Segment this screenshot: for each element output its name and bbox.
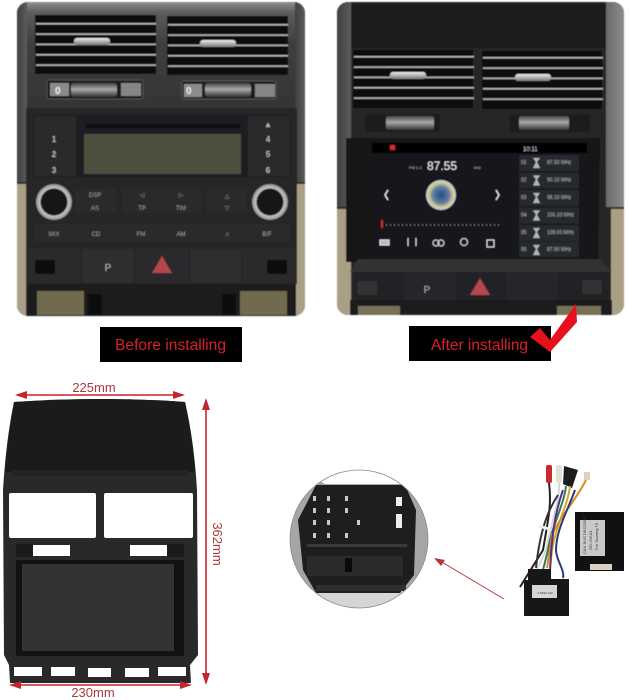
preset buttons: 3 [52, 166, 57, 175]
hazard triangle [470, 278, 490, 295]
radio function buttons: △ [225, 194, 230, 200]
radio function buttons: ▽ [225, 206, 230, 212]
preset frequency list: 90.10 MHz [547, 178, 572, 184]
harness plug: 2-5395-132 [537, 591, 553, 595]
upper hood shade [5, 399, 195, 472]
left air vent [35, 15, 156, 74]
preset buttons [52, 120, 272, 175]
radio function buttons: TIM [176, 206, 186, 212]
right air vent [482, 51, 603, 109]
panel: dashboard after installing [337, 2, 624, 315]
hazard triangle [152, 256, 172, 273]
radio function buttons: TP [138, 206, 146, 212]
icon: red check mark [530, 304, 577, 352]
radio function buttons: ◁ [140, 193, 145, 199]
lower trays [37, 291, 287, 315]
mounting frame [346, 138, 600, 262]
status bar: 10:11 [523, 147, 538, 153]
radio control icons [380, 238, 494, 247]
hood lip [12, 470, 188, 476]
connector slots [396, 497, 402, 506]
preset frequency list: 06 [521, 247, 527, 253]
lower trays [358, 306, 601, 315]
screen recess [16, 560, 184, 656]
status bar [372, 143, 587, 153]
preset frequency list: 98.10 MHz [547, 195, 572, 201]
left vent dial: 0 [55, 86, 61, 97]
width arrow: 225mm [15, 380, 185, 399]
width arrow: 230mm [9, 681, 192, 700]
right vent dial [182, 81, 276, 99]
harness plug [524, 569, 569, 616]
canbus decoder box: OD-VW-04 [588, 530, 593, 550]
preset buttons: 2 [52, 150, 57, 159]
android radio screen [372, 143, 587, 258]
radio function buttons: B/F [262, 232, 272, 238]
height arrow: 362mm: 362mm [210, 522, 225, 566]
lower switches [27, 249, 296, 283]
right vent dial: 0 [186, 86, 192, 97]
right chrome knob [252, 184, 288, 220]
label: before installing: Before installing [115, 337, 226, 354]
radio function buttons [34, 189, 289, 242]
label: after installing: After installing [431, 337, 528, 354]
preset frequency list: 87.50 MHz [547, 247, 572, 253]
radio function buttons: AS [91, 206, 99, 212]
width arrow: 230mm: 230mm [71, 685, 115, 700]
preset frequency list: 01 [521, 160, 527, 166]
vent dials [365, 114, 590, 132]
right air vent [167, 16, 288, 75]
canbus decoder box [575, 512, 624, 571]
frame screen [22, 564, 174, 651]
frequency readout [409, 159, 481, 173]
album art [426, 180, 456, 210]
frequency readout: FM 1-1 [409, 165, 422, 170]
preset frequency list: 02 [521, 178, 527, 184]
wiring harness [520, 465, 590, 616]
lower switches: P [424, 285, 431, 296]
preset buttons: ▲ [264, 120, 272, 129]
preset buttons: 5 [266, 150, 271, 159]
preset frequency list: 108.00 MHz [547, 230, 574, 236]
canbus decoder box: CAN BUS DECODER [582, 515, 587, 554]
radio function buttons: ▷ [179, 193, 184, 199]
preset buttons: 4 [266, 135, 271, 144]
left vent dial [47, 80, 143, 99]
preset buttons: 1 [52, 135, 57, 144]
width arrow: 225mm: 225mm [72, 380, 116, 395]
lower switches: P [105, 263, 112, 274]
wire bundle [520, 480, 586, 587]
radio display [84, 134, 241, 174]
left chrome knob [36, 184, 72, 220]
previous and next arrows [385, 190, 499, 200]
vent dial recesses [16, 544, 184, 557]
label: after installing [409, 326, 551, 361]
height arrow: 362mm [202, 398, 225, 685]
preset frequency list: 03 [521, 195, 527, 201]
preset frequency list: 05 [521, 230, 527, 236]
preset frequency list [519, 155, 579, 257]
frequency readout: 87.55 [427, 159, 457, 173]
preset frequency list: 04 [521, 212, 527, 218]
tuning scale [381, 220, 502, 228]
radio head unit [33, 115, 291, 177]
panel: dashboard before installing [17, 2, 305, 316]
left air vent [353, 50, 474, 108]
rca plugs [546, 465, 590, 488]
canbus decoder box: For Touareg T5 [594, 522, 599, 550]
fascia frame [3, 399, 198, 683]
preset frequency list: 106.10 MHz [547, 212, 574, 218]
preset frequency list: 87.50 MHz [547, 160, 572, 166]
connector pins [313, 496, 360, 538]
panel: connector close-up circle [290, 470, 428, 610]
label: before installing [100, 327, 242, 362]
radio function buttons: CD [92, 232, 101, 238]
radio function buttons: DSP [89, 193, 101, 199]
arrow: harness to close-up [434, 558, 504, 599]
radio function buttons: AM [176, 232, 186, 238]
radio function buttons: MIX [49, 232, 59, 238]
panel: fitting frame with dimensions [3, 380, 225, 700]
lower switches [350, 259, 612, 300]
radio function buttons: FM [137, 232, 145, 238]
radio function buttons: ♫ [225, 232, 229, 238]
frequency readout: kHz [474, 165, 481, 170]
preset buttons: 6 [266, 166, 271, 175]
